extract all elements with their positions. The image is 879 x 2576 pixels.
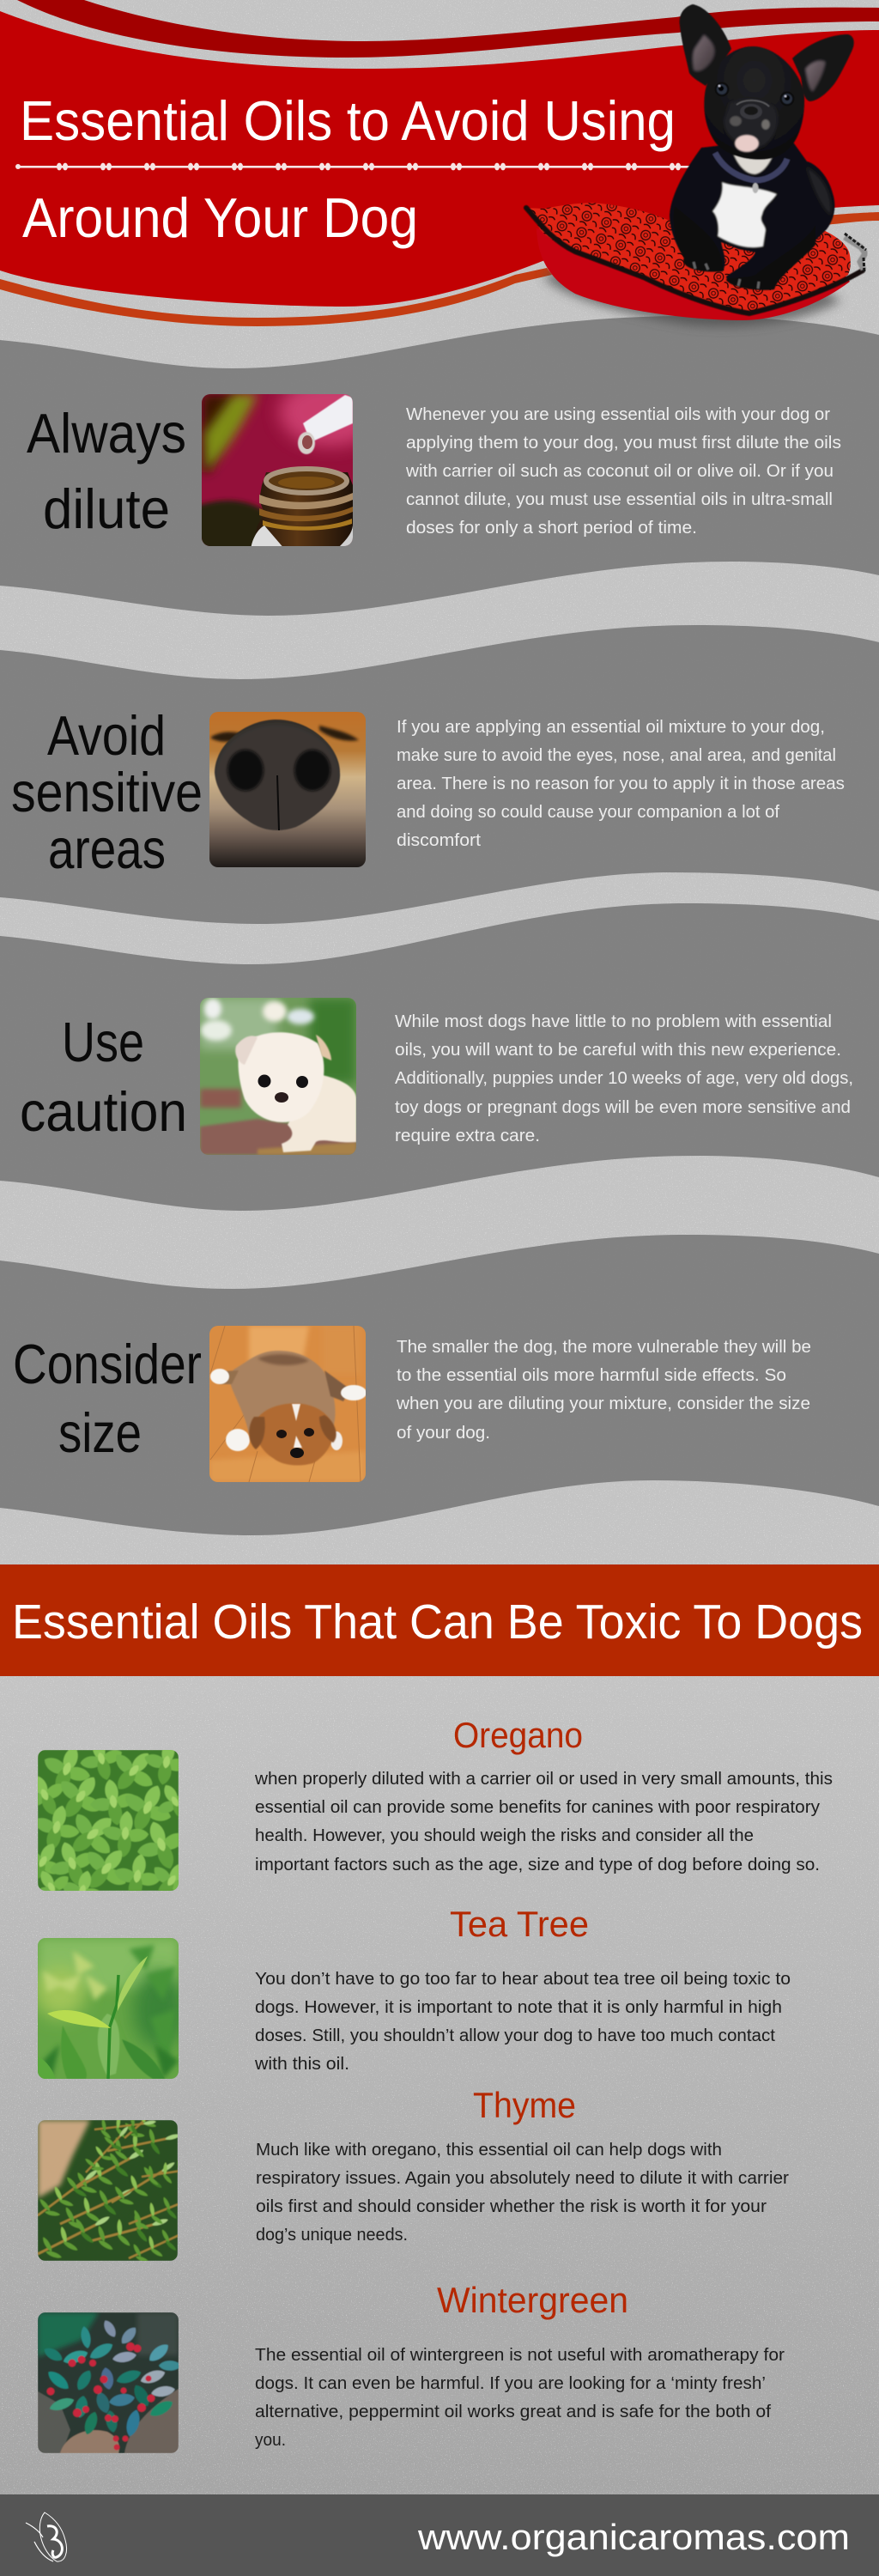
body text: area. There is no reason for you to apply it in those areas — [397, 774, 845, 793]
chest patch — [712, 182, 777, 247]
body text: doses for only a short period of time. — [406, 518, 697, 538]
heading: sensitive — [11, 761, 203, 823]
title: Essential Oils to Avoid Using — [20, 89, 676, 152]
heading — [20, 1011, 187, 1143]
berries — [46, 2342, 155, 2451]
heading: areas — [48, 817, 166, 880]
oil: oregano — [38, 1722, 833, 1891]
body text: with carrier oil such as coconut oil or olive oil. Or if you — [405, 461, 834, 481]
heading: caution — [20, 1080, 187, 1143]
body text: oils, you will want to be careful with this new experience. — [395, 1040, 841, 1060]
puppy head — [255, 1403, 333, 1465]
body text: If you are applying an essential oil mixture to your dog, — [397, 717, 825, 737]
body text: of your dog. — [397, 1423, 490, 1443]
body text: Much like with oregano, this essential oil can help dogs with — [256, 2140, 722, 2160]
stem — [108, 1975, 118, 2079]
body text — [255, 2345, 785, 2450]
body text: make sure to avoid the eyes, nose, anal area, and genital — [397, 745, 836, 765]
body — [670, 137, 834, 290]
grey wave band 1 — [0, 316, 879, 616]
heading: Avoid — [47, 704, 166, 767]
photo: puppy on wood floor — [209, 1326, 367, 1482]
lower section background — [0, 1676, 879, 2494]
body text — [254, 1769, 833, 1874]
puppy head — [239, 1032, 324, 1122]
body text: applying them to your dog, you must first dilute the oils — [406, 433, 841, 453]
dropper — [303, 395, 353, 442]
body text: Additionally, puppies under 10 weeks of age, very old dogs, — [395, 1068, 853, 1088]
body text: The essential oil of wintergreen is not useful with aromatherapy for — [255, 2345, 785, 2365]
title — [20, 89, 676, 249]
website url: www.organicaromas.com — [417, 2517, 850, 2557]
heading: Consider — [13, 1333, 202, 1395]
bright leaves — [118, 1956, 148, 2011]
body text: with this oil. — [254, 2054, 349, 2074]
photo: white puppy — [200, 998, 356, 1155]
heading: size — [58, 1401, 142, 1464]
header banner — [0, 0, 879, 326]
heading: Tea Tree — [450, 1904, 589, 1944]
page background — [0, 0, 879, 1683]
body text: discomfort — [397, 830, 481, 850]
bottle — [252, 472, 353, 550]
oil: wintergreen — [38, 2280, 785, 2453]
footer — [0, 2494, 879, 2576]
orange ribbon left — [0, 268, 552, 326]
body text — [397, 717, 845, 850]
body text: require extra care. — [395, 1126, 540, 1145]
body text: important factors such as the age, size and type of dog before doing so. — [255, 1855, 820, 1874]
body text — [405, 404, 841, 538]
heading: Wintergreen — [437, 2280, 628, 2320]
heading — [11, 704, 203, 880]
oil: tea tree — [34, 1904, 791, 2079]
photo: dog nose — [209, 712, 366, 867]
body text: and doing so could cause your companion a lot of — [397, 802, 779, 822]
heading — [13, 1333, 202, 1464]
section: avoid sensitive areas — [12, 712, 845, 869]
orange ribbon right — [815, 212, 879, 226]
bone divider — [15, 160, 691, 173]
cushion — [526, 203, 866, 320]
heading: dilute — [43, 477, 170, 540]
body text — [395, 1012, 853, 1145]
cushion shadow — [543, 258, 841, 326]
body text: toy dogs or pregnant dogs will be even more sensitive and — [395, 1097, 851, 1117]
body text: to the essential oils more harmful side effects. So — [397, 1365, 786, 1385]
body text — [396, 1337, 811, 1443]
photo: dropper over bottle — [202, 394, 353, 546]
heading — [27, 402, 186, 540]
left ear — [680, 4, 731, 86]
icon: butterfly logo — [26, 2512, 67, 2561]
body text: dogs. However, it is important to note that it is only harmful in high — [255, 1997, 782, 2017]
body text: alternative, peppermint oil works great and is safe for the both of — [255, 2402, 771, 2421]
section: always dilute — [27, 394, 841, 546]
heading: Oregano — [453, 1715, 583, 1755]
dog — [670, 4, 854, 290]
heading: Thyme — [473, 2085, 576, 2125]
grey wave band 3 — [0, 903, 879, 1211]
dark red ribbon — [17, 0, 879, 58]
body text: when properly diluted with a carrier oil or used in very small amounts, this — [254, 1769, 833, 1789]
grey wave band 4 — [0, 1235, 879, 1535]
section: consider size — [13, 1326, 811, 1482]
body text: you. — [255, 2430, 286, 2450]
muzzle — [737, 100, 769, 106]
leaves — [42, 2318, 181, 2438]
body text: The smaller the dog, the more vulnerable they will be — [397, 1337, 811, 1357]
body text: doses. Still, you shouldn’t allow your dog to have too much contact — [255, 2026, 775, 2045]
section: use caution — [20, 998, 853, 1155]
photo: oregano leaves — [38, 1750, 179, 1891]
oil: thyme — [28, 2085, 789, 2266]
head — [704, 46, 804, 160]
collar — [715, 153, 787, 180]
eyes — [714, 82, 730, 96]
body text: essential oil can provide some benefits for canines with poor respiratory — [255, 1797, 821, 1817]
heading: Use — [62, 1011, 144, 1073]
puppy body — [230, 1351, 336, 1434]
body text: when you are diluting your mixture, consider the size — [396, 1394, 810, 1413]
title: Around Your Dog — [22, 186, 418, 249]
photo: thyme sprigs — [38, 2120, 178, 2261]
photo: wintergreen plant — [38, 2312, 181, 2453]
body text: While most dogs have little to no problem with essential — [395, 1012, 832, 1031]
body text: dogs. It can even be harmful. If you are looking for a ‘minty fresh’ — [255, 2373, 766, 2393]
body text: You don’t have to go too far to hear about tea tree oil being toxic to — [255, 1969, 791, 1989]
body text: Whenever you are using essential oils with your dog or — [406, 404, 830, 424]
legs — [674, 206, 723, 271]
rocks — [38, 2391, 70, 2453]
body text — [254, 1969, 791, 2074]
white paws — [210, 1369, 229, 1384]
body text: health. However, you should weigh the risks and consider all the — [255, 1826, 754, 1845]
heading: Always — [27, 402, 186, 465]
grey wave band 2 — [0, 625, 879, 924]
red header shape — [0, 11, 879, 307]
toxic oils banner — [0, 1564, 879, 1676]
lower leaves — [61, 2026, 87, 2079]
body text: respiratory issues. Again you absolutely need to dilute it with carrier — [256, 2168, 789, 2188]
right ear — [792, 34, 854, 101]
body text — [256, 2140, 789, 2245]
puppy body — [282, 1073, 356, 1152]
body text: dog’s unique needs. — [256, 2225, 408, 2245]
photo: puppy on red cushion — [526, 4, 866, 320]
body text: oils first and should consider whether the risk is worth it for your — [256, 2196, 767, 2216]
body text: cannot dilute, you must use essential oils in ultra-small — [406, 489, 833, 509]
photo: tea plant — [34, 1938, 185, 2079]
